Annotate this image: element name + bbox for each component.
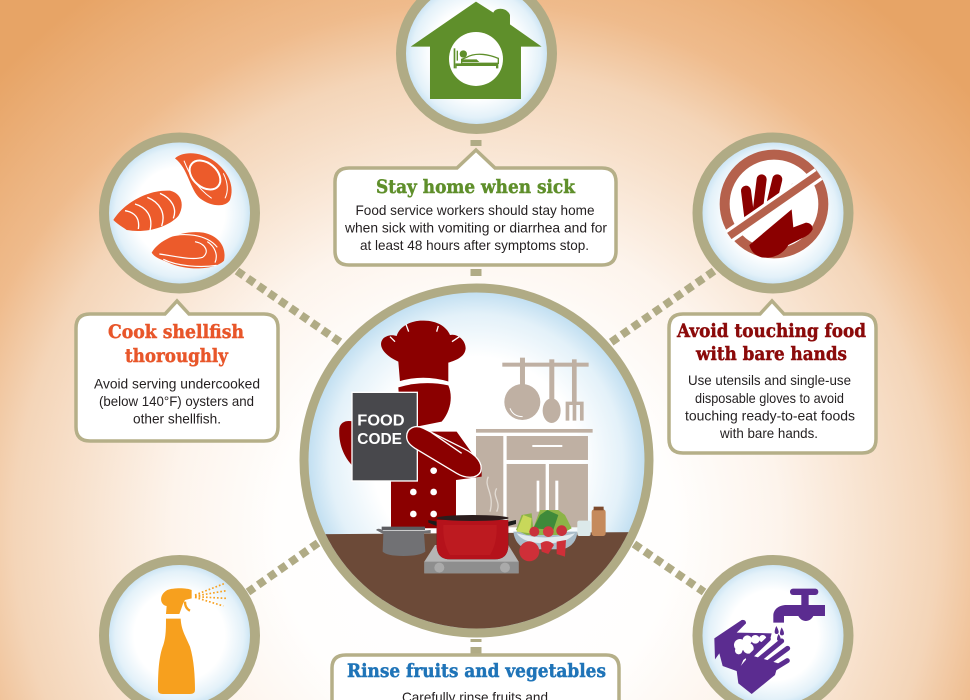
panel: avoid touching food with bare hands: [669, 138, 876, 453]
callout: avoid touching food with bare hands: [669, 301, 876, 453]
callout: avoid touching food with bare hands: Avoid touching food: [676, 321, 866, 342]
salad bowl: [513, 510, 577, 549]
panel: spray bottle: [104, 560, 255, 700]
callout: cook shellfish thoroughly: (below 140°F) oysters and: [99, 393, 254, 409]
food code book: FOOD: [357, 412, 405, 429]
chef arm: [407, 427, 481, 477]
kitchen cabinet: [476, 429, 593, 527]
icon: prohibited hand: [698, 138, 848, 288]
panel: stay home when sick: [335, 0, 616, 265]
food code book: CODE: [357, 431, 402, 448]
callout: avoid touching food with bare hands: touching ready-to-eat foods: [685, 408, 855, 424]
panel: cook shellfish thoroughly: [76, 138, 278, 441]
icon: oysters: [104, 138, 255, 288]
callout: cook shellfish thoroughly: [76, 301, 278, 441]
icon: house with sick person in bed: [401, 0, 552, 129]
grey pot: [376, 527, 431, 556]
callout: stay home when sick: at least 48 hours after symptoms stop.: [360, 237, 589, 253]
connector squares: [470, 140, 482, 654]
panel: rinse fruits and vegetables: Rinse fruits and vegetables: [347, 661, 606, 682]
hanging utensils: [502, 358, 589, 423]
icon: spray bottle: [158, 583, 227, 694]
panel: rinse fruits and vegetables: [332, 655, 619, 700]
callout: stay home when sick: Stay home when sick: [376, 177, 576, 198]
callout: cook shellfish thoroughly: Avoid serving undercooked: [94, 376, 260, 392]
panel: wash hands: [698, 560, 848, 700]
counter: [326, 532, 628, 628]
callout: cook shellfish thoroughly: other shellfish.: [133, 410, 221, 426]
glass and jar: [577, 507, 606, 536]
callout: stay home when sick: [335, 150, 616, 265]
panel: central chef illustration: [300, 288, 653, 640]
callout: avoid touching food with bare hands: disposable gloves to avoid: [695, 390, 844, 406]
kitchen scene: [326, 320, 628, 628]
chef: [339, 321, 482, 528]
strawberries: [519, 540, 566, 561]
callout: cook shellfish thoroughly: Cook shellfish: [108, 322, 245, 343]
dotted connectors: [237, 271, 714, 592]
icon: hand washing under faucet: [714, 589, 825, 694]
callout: avoid touching food with bare hands: with bare hands.: [719, 425, 818, 441]
callout: avoid touching food with bare hands: Use utensils and single-use: [688, 372, 851, 388]
food code book: [352, 392, 417, 481]
stove: [424, 545, 519, 573]
callout: stay home when sick: when sick with vomiting or diarrhea and for: [344, 220, 607, 236]
callout: stay home when sick: Food service workers should stay home: [356, 202, 595, 218]
callout: avoid touching food with bare hands: with bare hands: [695, 344, 847, 365]
red pot: [428, 515, 516, 559]
callout: cook shellfish thoroughly: thoroughly: [125, 346, 229, 367]
